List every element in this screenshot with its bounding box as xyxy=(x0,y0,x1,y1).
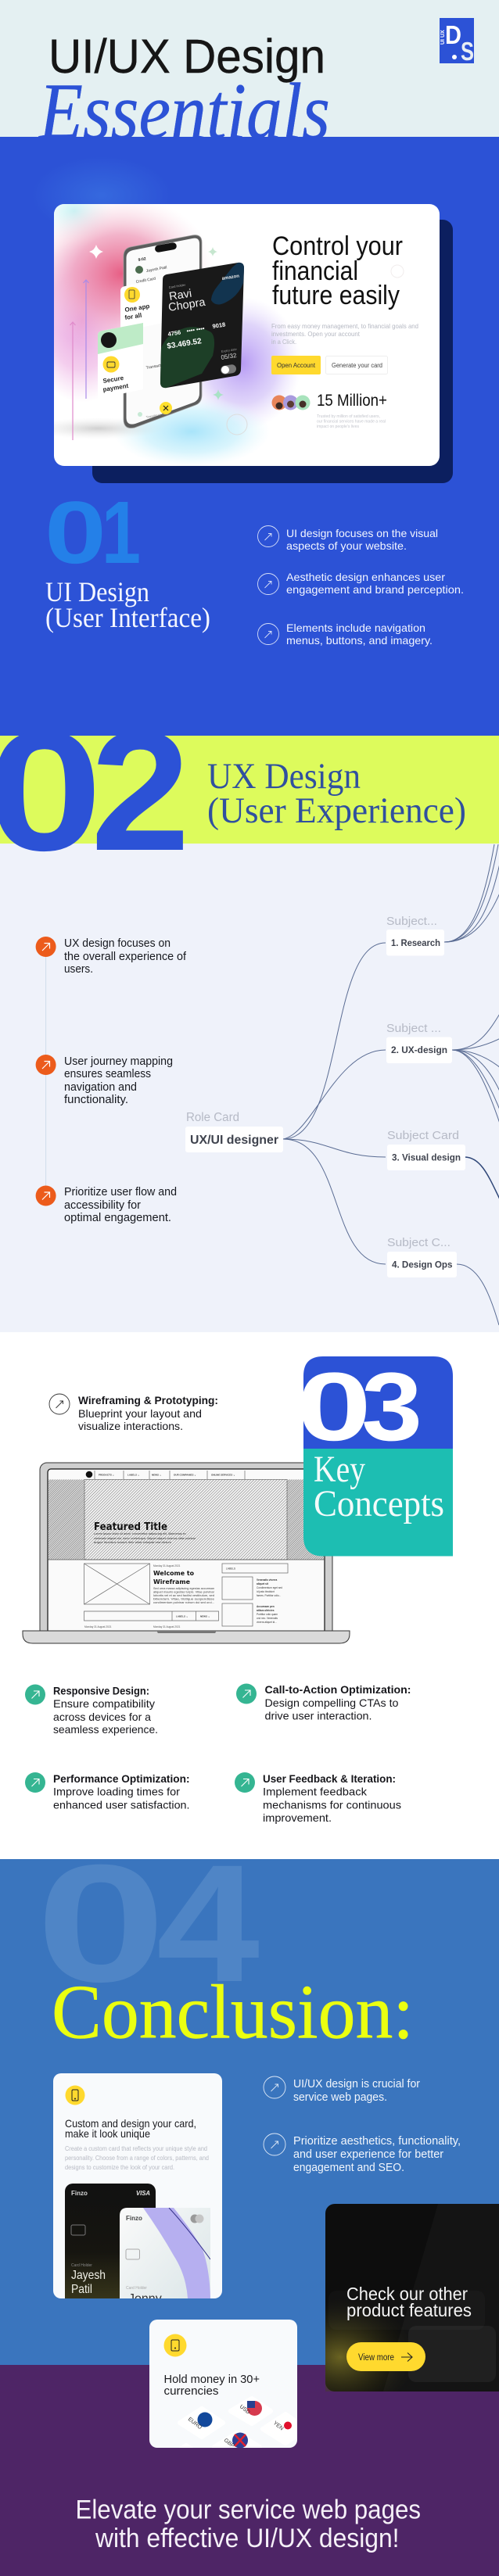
bullet: elements xyxy=(258,622,433,647)
subject card: UX-design xyxy=(386,1022,452,1063)
bullet: responsive design: across devices for a xyxy=(53,1711,151,1723)
phone mockup xyxy=(124,235,202,428)
bullet: user journey: functionality. xyxy=(64,1094,128,1106)
heading: UX Design: UX Design xyxy=(207,756,361,797)
subject card: design ops: Subject C... xyxy=(387,1236,451,1249)
number 02 xyxy=(0,697,190,887)
bullet: responsive design: Ensure compatibility xyxy=(53,1697,155,1710)
card: other product features xyxy=(325,2204,499,2391)
wireframe featured title xyxy=(94,1521,196,1544)
phone mockup: Transaction xyxy=(145,363,167,371)
bullet: UX focus: the overall experience of xyxy=(64,951,187,963)
bullet: call to action xyxy=(236,1683,411,1722)
black credit card: amazon xyxy=(221,274,240,281)
wireframe image placeholder xyxy=(84,1564,150,1604)
wireframe nav: ONLINE SERVICES ⌄ xyxy=(211,1473,235,1476)
wireframe sidebar: atibus ultricies xyxy=(257,1609,275,1612)
number 01: 1 xyxy=(102,483,141,582)
card heading xyxy=(65,2117,196,2140)
wireframe sidebar: Porttitor odio quam xyxy=(257,1613,278,1616)
bullet: call to action: Design compelling CTAs to xyxy=(264,1696,399,1709)
hero heading xyxy=(272,231,403,310)
bullet: user journey: ensures seamless xyxy=(64,1068,151,1080)
heading: UI Design xyxy=(45,576,210,633)
white finzo card: Jonny xyxy=(128,2292,162,2306)
title: UI/UX Design: UI/UX Design xyxy=(48,30,325,83)
bullet: responsive design xyxy=(25,1684,158,1736)
icon: arrows rising xyxy=(70,280,89,440)
subject card: research: Subject... xyxy=(386,915,437,928)
card: custom design your card xyxy=(53,2073,222,2314)
subject card: visual design xyxy=(387,1129,465,1170)
laptop wireframe mockup xyxy=(23,1463,350,1643)
icon: phone badge xyxy=(66,2086,84,2105)
subject card: UX-design: 2. UX-design xyxy=(391,1046,447,1055)
wireframe article: bibendum. Vitae, tristique suspendisse xyxy=(153,1598,214,1601)
logo: UI UX xyxy=(440,30,446,45)
wireframe sidebar: orci nec. Venenatis xyxy=(257,1617,278,1620)
wireframe search bar: Monday 31 August 2021 xyxy=(153,1625,181,1628)
timeline bullets xyxy=(36,937,187,1224)
button: open account xyxy=(271,356,321,374)
heading: UI Design: (User Interface) xyxy=(45,602,210,633)
title: Essentials: Essentials xyxy=(38,67,330,156)
bullet: aesthetic design: Aesthetic design enhances user xyxy=(286,571,445,583)
role card: UX/UI designer xyxy=(190,1134,278,1147)
subject card: research: 1. Research xyxy=(391,939,440,948)
wireframe nav xyxy=(86,1471,245,1479)
black credit card: 9018 xyxy=(212,321,226,330)
key concepts title card xyxy=(296,1353,453,1556)
hero gradient glow xyxy=(54,204,294,463)
bullet: user flow xyxy=(36,1185,177,1224)
wireframe article: condimentum pulvinar rutrum dui sed orci... xyxy=(153,1601,214,1604)
black credit card: 05/32 xyxy=(221,352,238,361)
wireframe article: lobortis vel et ac sed facilisi vestibulum, sed xyxy=(153,1594,214,1597)
bullet: wireframing: visualize interactions. xyxy=(78,1420,183,1432)
bullet: call to action: Call-to-Action Optimization: xyxy=(264,1683,411,1696)
hero heading: financial xyxy=(272,256,358,286)
phone mockup: Jayesh Patil xyxy=(145,265,167,274)
icon: stars xyxy=(89,245,404,435)
bullet: user feedback xyxy=(235,1772,401,1824)
black credit card: $3.469.52 xyxy=(167,337,203,351)
bullet: wireframing xyxy=(49,1394,218,1432)
number 04: 0 xyxy=(36,1830,166,2017)
card: secure payment xyxy=(98,323,143,399)
card heading: make it look unique xyxy=(65,2127,150,2140)
bullet: prioritize xyxy=(264,2134,461,2174)
hero heading: Control your xyxy=(272,231,403,261)
bullet: crucial: service web pages. xyxy=(293,2091,387,2104)
card heading: Check our other xyxy=(346,2284,468,2304)
stat caption: impact on people's lives xyxy=(317,425,359,429)
bullet: user feedback: Implement feedback xyxy=(263,1786,368,1798)
number 01: 0 xyxy=(45,483,106,582)
bullet: UX focus: users. xyxy=(64,963,93,976)
black finzo card: Finzo xyxy=(71,2190,88,2197)
subject card: visual design: 3. Visual design xyxy=(392,1154,461,1163)
wireframe nav: OUR COMPANIES ⌄ xyxy=(174,1473,196,1476)
number 03: 0 xyxy=(296,1353,372,1461)
black credit card xyxy=(160,263,244,388)
bullet: elements: menus, buttons, and imagery. xyxy=(286,634,433,647)
card: secure payment: payment xyxy=(102,382,129,393)
bullet: wireframing: Wireframing & Prototyping: xyxy=(78,1394,218,1406)
wireframe sidebar: aliquet sit xyxy=(257,1582,269,1585)
hero subtext: From easy money management, to financial goals and xyxy=(271,322,418,330)
black finzo card: VISA xyxy=(136,2190,150,2197)
number 01 xyxy=(45,483,141,582)
mind map connectors xyxy=(283,844,499,1325)
card body xyxy=(65,2145,209,2171)
currency tiles xyxy=(188,2401,292,2448)
card: one app for all: One app xyxy=(124,303,150,313)
hero heading: future easily xyxy=(272,281,400,310)
bullet: user feedback: improvement. xyxy=(263,1811,332,1824)
subject card: design ops: 4. Design Ops xyxy=(392,1260,452,1270)
subject card: visual design: Subject Card xyxy=(387,1129,459,1142)
black finzo card xyxy=(65,2184,156,2309)
bullet: elements: Elements include navigation xyxy=(286,622,425,634)
button: generate card: Generate your card xyxy=(332,362,382,369)
currency tiles: GBP xyxy=(223,2438,235,2449)
wireframe search bar xyxy=(84,1611,219,1628)
card heading: Custom and design your card, xyxy=(65,2117,196,2130)
black credit card: Chopra xyxy=(167,296,207,314)
bullet: user journey: navigation and xyxy=(64,1081,137,1094)
panel: hero website card xyxy=(54,204,440,466)
bullet: visual aspects: aspects of your website. xyxy=(286,539,407,552)
wireframe article: Sed urna massa adipiscing egestas accumsan xyxy=(153,1587,214,1590)
logo: S xyxy=(461,37,474,66)
wireframe sidebar: viverra aliquet id... xyxy=(257,1621,277,1624)
closing statement xyxy=(75,2495,421,2553)
heading: UX Design: (User Experience) xyxy=(207,790,466,831)
heading: key concepts xyxy=(314,1449,444,1524)
bullet: aesthetic design xyxy=(258,571,464,596)
wireframe search bar: NEWS ⌄ xyxy=(200,1615,210,1618)
bullet: crucial xyxy=(264,2076,420,2104)
black credit card: •••• •••• xyxy=(186,324,205,335)
wireframe article: Wireframe xyxy=(153,1578,191,1585)
wireframe sidebar: Condimentum eget sed xyxy=(257,1586,282,1589)
bullet: performance: Improve loading times for xyxy=(53,1786,180,1798)
wireframe sidebar: Venenatis viverra xyxy=(257,1578,277,1582)
black finzo card: Jayesh xyxy=(71,2269,106,2282)
hero subtext xyxy=(271,322,418,346)
panel: section 01 UI design xyxy=(0,67,499,736)
number 03 xyxy=(303,1372,418,1442)
heading: key concepts: Concepts xyxy=(314,1483,444,1524)
wireframe nav: NEWS ⌄ xyxy=(152,1473,161,1476)
logo xyxy=(440,18,474,66)
card heading xyxy=(164,2373,260,2398)
subject card: research xyxy=(386,915,444,955)
card: hold money in currencies xyxy=(149,2320,297,2448)
card: secure payment: Secure xyxy=(102,374,124,385)
bullet: UX focus xyxy=(36,937,187,976)
wireframe article: aliquet mauris egestas turpis. Vitae pulvinar xyxy=(153,1590,215,1593)
currency tiles: USD xyxy=(239,2404,251,2416)
wireframe sidebar: LABELS xyxy=(226,1567,235,1570)
number 03: 3 xyxy=(361,1353,422,1461)
heading: UX Design xyxy=(207,756,466,831)
bullet: user flow: optimal engagement. xyxy=(64,1212,171,1224)
card heading: Hold money in 30+ xyxy=(164,2373,260,2386)
number 04 xyxy=(45,1864,258,1983)
card shadow xyxy=(92,220,453,483)
stat caption: Trusted by million of satisfied users, xyxy=(317,414,380,419)
card body: designs to customize the look of your card. xyxy=(65,2164,174,2171)
card: one app for all: for all xyxy=(124,312,142,321)
card body: personality. Choose from a range of colors, patterns, and xyxy=(65,2155,209,2162)
bullet: responsive design: seamless experience. xyxy=(53,1723,158,1736)
wireframe sidebar xyxy=(222,1564,288,1626)
black finzo card: Card Holder xyxy=(71,2263,92,2268)
stat caption xyxy=(317,414,386,429)
phone mockup: Transfer to Nust xyxy=(145,411,169,419)
icon: phone badge xyxy=(164,2334,186,2356)
wireframe article: Welcome to xyxy=(153,1570,194,1577)
card heading: currencies xyxy=(164,2384,219,2398)
heading: key concepts: Key xyxy=(314,1449,365,1490)
stat caption: our financial services have made a real xyxy=(317,419,386,424)
wireframe search bar: Monday 31 August 2021 xyxy=(84,1625,112,1628)
wireframe featured title: Featured Title xyxy=(94,1521,167,1533)
card heading xyxy=(346,2284,472,2320)
card body: Create a custom card that reflects your unique style and xyxy=(65,2145,207,2152)
bullet: aesthetic design: engagement and brand perception. xyxy=(286,583,464,596)
bullet: UX focus: UX design focuses on xyxy=(64,937,171,950)
subject card: UX-design: Subject ... xyxy=(386,1022,441,1035)
bullet: user journey xyxy=(36,1055,173,1106)
bullet: visual aspects xyxy=(258,525,438,552)
card heading: product features xyxy=(346,2300,472,2320)
wireframe featured title: venenatis aliquet nisl, tortor scelerisque. Aliquet aliquet vivamus vitae pulvinar xyxy=(94,1537,196,1540)
bullet: crucial: UI/UX design is crucial for xyxy=(293,2078,420,2091)
wireframe nav: LABELS ⌄ xyxy=(127,1473,139,1476)
heading: conclusion: Conclusion: xyxy=(52,1970,414,2055)
bullet: user feedback: User Feedback & Iteration: xyxy=(263,1772,396,1785)
bullet: prioritize: Prioritize aesthetics, functionality, xyxy=(293,2135,461,2148)
panel: section 03 key concepts xyxy=(22,1356,453,1824)
white finzo card: Finzo xyxy=(126,2215,142,2222)
wireframe sidebar: Accumsan pen xyxy=(257,1605,275,1608)
bullet: user journey: User journey mapping xyxy=(64,1055,173,1068)
card: one app for all xyxy=(120,278,167,331)
button: generate card xyxy=(325,356,388,374)
black credit card: Ravi xyxy=(168,288,192,303)
closing statement: with effective UI/UX design! xyxy=(95,2524,399,2553)
black finzo card: Patil xyxy=(71,2283,92,2296)
bullet: performance: enhanced user satisfaction. xyxy=(53,1798,189,1811)
bullet: user flow: accessibility for xyxy=(64,1199,141,1212)
stat: 15 Million+: 15 Million+ xyxy=(317,392,387,410)
wireframe article: Monday 31 August 2021 xyxy=(153,1564,181,1567)
currency tiles: EURO xyxy=(187,2417,203,2431)
bullet: prioritize: engagement and SEO. xyxy=(293,2162,404,2174)
avatars xyxy=(272,396,310,410)
wireframe article xyxy=(153,1564,215,1604)
panel: section 02 UX design xyxy=(0,697,499,1332)
phone mockup: 9:02 xyxy=(138,256,146,263)
phone mockup: Credit Card xyxy=(135,277,156,285)
role card xyxy=(185,1111,283,1152)
hero subtext: investments. Open your account xyxy=(271,330,361,338)
bullet: call to action: drive user interaction. xyxy=(264,1709,372,1722)
logo: D xyxy=(445,20,461,49)
wireframe search bar: LABELS ⌄ xyxy=(176,1615,188,1618)
button: open account: Open Account xyxy=(277,362,316,369)
wireframe sidebar: id justo tincidunt xyxy=(257,1590,275,1593)
button: view more xyxy=(346,2342,425,2371)
bullet: visual aspects: UI design focuses on the visual xyxy=(286,527,438,539)
heading: UI Design: UI Design xyxy=(45,576,149,607)
button: view more: View more xyxy=(358,2353,394,2363)
bullet: responsive design: Responsive Design: xyxy=(53,1684,149,1696)
white finzo card: Card Holder xyxy=(126,2286,147,2291)
number 04: 4 xyxy=(156,1830,260,2017)
black credit card: 4756 xyxy=(167,328,181,338)
subject card: design ops xyxy=(387,1236,457,1277)
white finzo card xyxy=(120,2208,210,2298)
bullet: performance: Performance Optimization: xyxy=(53,1772,189,1785)
wireframe featured title: Lorem ipsum dolor sit amet, consectetur adipiscing elit. Maecenas ex xyxy=(94,1532,186,1535)
wireframe featured title: augue faucibus mauris felis vitae volutpat sed dictum xyxy=(94,1541,171,1544)
black credit card: Card Holder xyxy=(168,283,186,289)
currency tiles: YEN xyxy=(272,2420,284,2431)
wireframe sidebar: fames. Porttitor odio... xyxy=(257,1594,281,1597)
bullet: wireframing: Blueprint your layout and xyxy=(78,1407,202,1420)
closing statement: Elevate your service web pages xyxy=(75,2495,421,2525)
panel: section 04 conclusion xyxy=(0,1830,499,2576)
bullet: performance xyxy=(25,1772,189,1811)
role card: Role Card xyxy=(186,1111,239,1124)
black credit card: Expiry date xyxy=(221,347,238,353)
laptop base xyxy=(23,1631,350,1643)
wireframe nav: PRODUCTS ⌄ xyxy=(99,1473,114,1476)
hero subtext: in a Click. xyxy=(271,338,296,346)
panel: header xyxy=(0,0,499,137)
bullet: prioritize: and user experience for better xyxy=(293,2148,443,2161)
number 02: 2 xyxy=(91,697,190,887)
bullet: user flow: Prioritize user flow and xyxy=(64,1186,177,1198)
bullet: user feedback: mechanisms for continuous xyxy=(263,1798,401,1811)
